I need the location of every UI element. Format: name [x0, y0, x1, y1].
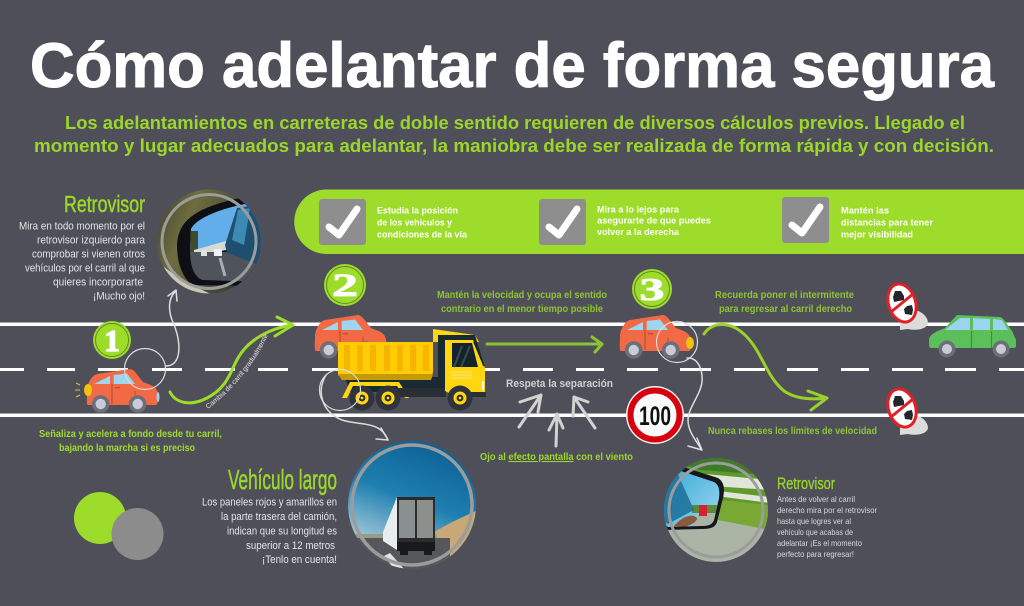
text block: retrovisor right: perfecto para regresar! — [777, 549, 854, 559]
road markings — [0, 322, 1024, 417]
green text: step 2: Mantén la velocidad y ocupa el sentido — [437, 289, 607, 301]
text block: retrovisor left: retrovisor izquierdo para — [37, 234, 146, 246]
text block: retrovisor left: vehículos por el carril al que — [25, 262, 145, 274]
text block: vehículo largo: indican que su longitud es — [227, 526, 337, 538]
arrow: green straight — [487, 337, 602, 352]
green text: step 1: bajando la marcha si es preciso — [59, 442, 195, 454]
text block: retrovisor left: ¡Mucho ojo! — [93, 290, 145, 302]
icon: no overtaking sign top — [883, 280, 928, 330]
arrow: car 3 to mirror photo — [687, 358, 702, 450]
text block: retrovisor left: quieres incorporarte — [53, 276, 143, 288]
car 3 — [620, 315, 694, 359]
text block: vehículo largo: superior a 12 metros — [246, 540, 335, 552]
subtitle text — [34, 113, 994, 156]
text block: retrovisor right — [777, 494, 877, 559]
photo: truck rear — [347, 441, 478, 570]
checklist text 2: asegurarte de que puedes — [597, 216, 711, 226]
checklist text 3: distancias para tener — [841, 218, 933, 228]
green text: step 2: contrario en el menor tiempo posible — [441, 303, 603, 315]
text block: retrovisor right: vehículo que acabas de — [777, 527, 853, 537]
decorative circles — [74, 492, 164, 560]
subtitle text: momento y lugar adecuados para adelantar, la maniobra debe ser realizada de forma rápida y con decisión. — [34, 136, 994, 156]
photo: right mirror — [662, 458, 770, 565]
text block: vehículo largo — [202, 496, 337, 566]
heading: Vehículo largo: Vehículo largo — [228, 464, 337, 495]
arrow: green return to lane — [704, 324, 827, 410]
icon: check 2 — [539, 199, 586, 245]
text block: retrovisor left — [19, 220, 146, 302]
circle highlight: truck rear — [320, 370, 360, 410]
text block: retrovisor right: Antes de volver al carril — [777, 494, 855, 504]
checklist text 1: Estudia la posición — [377, 206, 458, 216]
green text: step 1 — [39, 428, 222, 454]
photo: left mirror — [157, 189, 262, 296]
text block: vehículo largo: la parte trasera del camión, — [221, 511, 337, 523]
step 1 badge: 1 — [104, 323, 120, 358]
arrow: car 1 to mirror photo — [166, 290, 179, 366]
green text: step 3 — [715, 289, 854, 315]
text block: retrovisor left: Mira en todo momento por el — [19, 220, 145, 232]
car 2 — [315, 315, 386, 359]
checklist text 3 — [841, 206, 933, 240]
step 1 badge — [93, 321, 131, 359]
sign: speed limit 100: 100 — [639, 401, 671, 431]
text block: vehículo largo: ¡Tenlo en cuenta! — [262, 554, 337, 566]
checklist text 1: de los vehículos y — [377, 218, 453, 228]
step 3 badge: 3 — [640, 271, 664, 307]
checklist text 1 — [377, 206, 468, 240]
arrow: truck to photo — [321, 375, 388, 440]
green text: speed limit: Nunca rebases los límites de velocidad — [708, 425, 877, 437]
panel: green checklist banner — [294, 190, 1024, 254]
label: efecto pantalla: Ojo al efecto pantalla con el viento — [480, 451, 633, 463]
heading: Retrovisor left: Retrovisor — [64, 191, 145, 217]
label: respect distance: Respeta la separación — [506, 378, 613, 390]
green text: step 3: para regresar al carril derecho — [719, 303, 852, 315]
text block: retrovisor left: comprobar si vienen otros — [32, 248, 145, 260]
checklist text 3: mejor visibilidad — [841, 230, 913, 240]
circle highlight: mirror on car 1 — [124, 348, 166, 390]
truck — [338, 329, 486, 410]
text block: retrovisor right: derecho mira por el retrovisor — [777, 505, 877, 515]
circle highlight: mirror on car 3 — [656, 322, 698, 362]
checklist text 1: condiciones de la vía — [377, 230, 468, 240]
icon: no overtaking sign bottom — [883, 385, 928, 435]
green text: step 2 — [437, 289, 607, 315]
checklist text 2: Mira a lo lejos para — [597, 204, 680, 216]
icon: check 1 — [319, 199, 366, 245]
checklist text 2 — [597, 204, 711, 238]
icon: check 3 — [782, 197, 829, 243]
step 2 badge — [324, 264, 366, 306]
arrows: wind — [519, 395, 595, 446]
car 1 — [75, 369, 160, 413]
sign: speed limit 100 — [626, 386, 684, 444]
text block: vehículo largo: Los paneles rojos y amarillos en — [202, 496, 337, 508]
label: lane change: Cambia de carril gradualmente — [206, 334, 268, 408]
heading: Retrovisor right: Retrovisor — [777, 474, 835, 493]
title: Cómo adelantar de forma segura — [30, 31, 995, 101]
text block: retrovisor right: adelantar ¡Es el momento — [777, 538, 862, 548]
step 2 badge: 2 — [332, 268, 358, 304]
step 3 badge — [632, 269, 672, 309]
checklist text 2: volver a la derecha — [597, 227, 680, 238]
checklist text 3: Mantén las — [841, 206, 889, 216]
text block: retrovisor right: hasta que logres ver al — [777, 516, 851, 526]
green car — [929, 315, 1016, 358]
green text: step 3: Recuerda poner el intermitente — [715, 289, 854, 301]
green text: step 1: Señaliza y acelera a fondo desde tu carril, — [39, 428, 222, 440]
arrow: green lane change — [170, 317, 293, 403]
subtitle text: Los adelantamientos en carreteras de doble sentido requieren de diversos cálculos previos. Llegado el — [65, 113, 965, 133]
